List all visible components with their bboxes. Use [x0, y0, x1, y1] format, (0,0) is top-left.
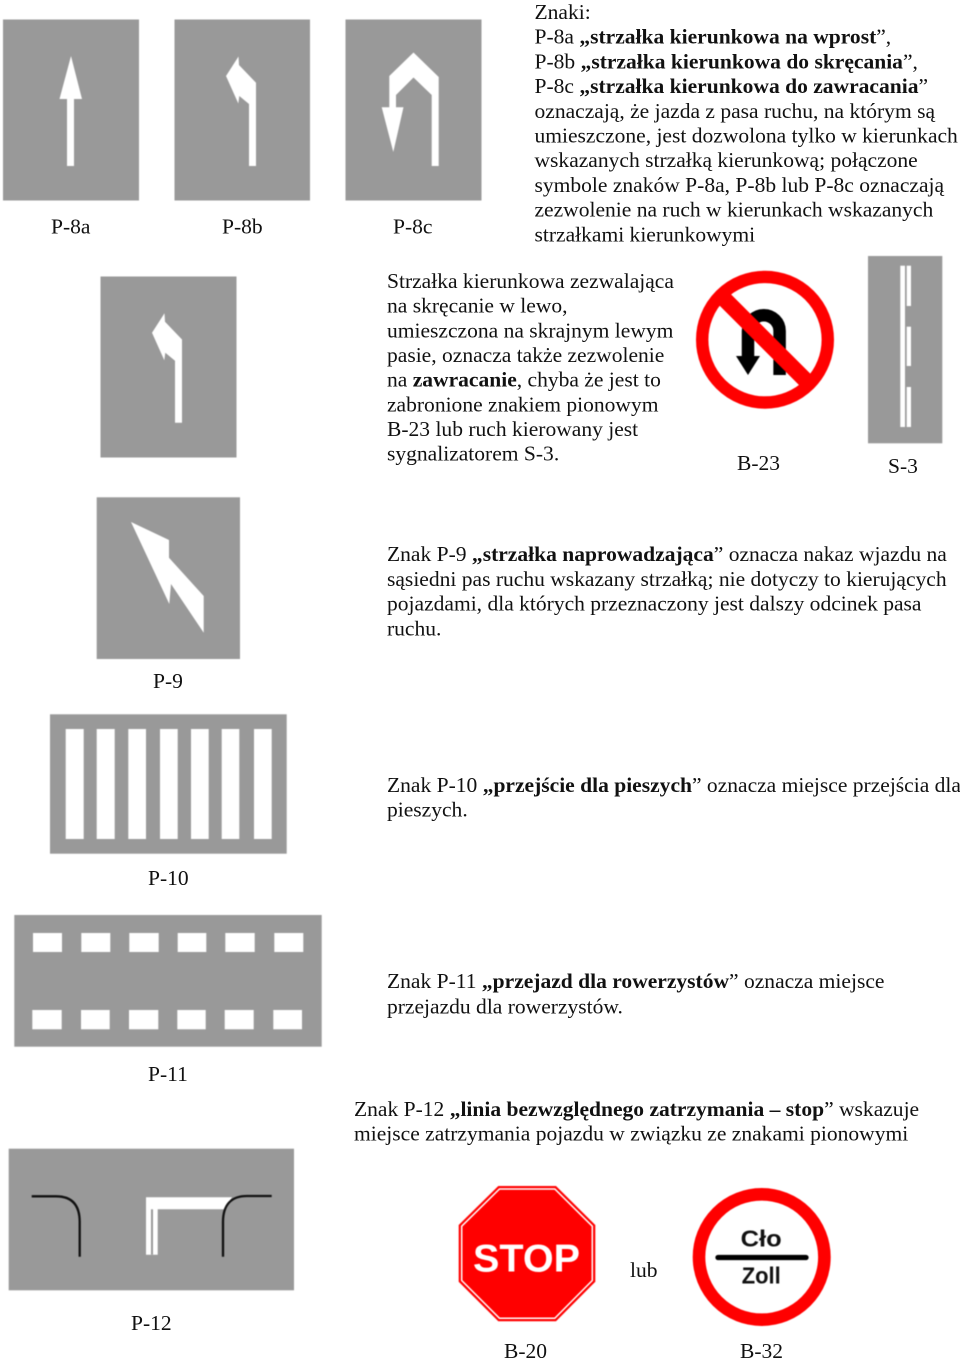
label P-12: P-12 [131, 1311, 172, 1335]
text: P-8 description: oznaczają, że jazda z pasa ruchu, na którym są [534, 99, 935, 123]
text: P-11 description: przejazdu dla rowerzystów. [387, 995, 623, 1019]
sign B-32: Cło [741, 1226, 782, 1252]
sign S-3 [868, 256, 942, 443]
sign P-10 [50, 714, 287, 854]
sign B-32: Zoll [742, 1262, 781, 1288]
sign B-20 STOP [459, 1186, 595, 1321]
sign B-32 [699, 1194, 824, 1320]
text: P-8 description: wskazanych strzałką kierunkową; połączone [534, 148, 918, 172]
text: left-turn arrow note: B-23 lub ruch kierowany jest [387, 417, 638, 441]
sign B-20 STOP: STOP [473, 1238, 580, 1281]
sign P-9 [97, 497, 240, 659]
text: lub: lub [630, 1258, 658, 1282]
text: left-turn arrow note: umieszczona na skrajnym lewym [387, 318, 674, 342]
text: P-12 description: miejsce zatrzymania pojazdu w związku ze znakami pionowymi [354, 1122, 908, 1146]
text: P-8 description: umieszczone, jest dozwolona tylko w kierunkach [534, 124, 958, 148]
text: P-9 description: ruchu. [387, 616, 441, 640]
text: left-turn arrow note: pasie, oznacza także zezwolenie [387, 343, 664, 367]
text: left-turn arrow note: na skręcanie w lewo, [387, 294, 568, 318]
text: P-11 description: Znak P-11 „przejazd dla rowerzystów” oznacza miejsce [387, 969, 884, 993]
label S-3: S-3 [888, 454, 918, 478]
text: P-10 description: Znak P-10 „przejście dla pieszych” oznacza miejsce przejścia dla [387, 773, 960, 797]
sign B-23 [702, 277, 828, 403]
label P-11: P-11 [148, 1062, 188, 1086]
label P-8b: P-8b [222, 214, 263, 238]
text: P-8 description: symbole znaków P-8a, P-8b lub P-8c oznaczają [534, 173, 945, 197]
text: P-8 description: Znaki: [534, 0, 591, 24]
text: P-8 description: zezwolenie na ruch w kierunkach wskazanych [534, 198, 933, 222]
label P-9: P-9 [153, 669, 183, 693]
text: P-8 description: P-8a „strzałka kierunkowa na wprost”, [534, 25, 891, 49]
label P-10: P-10 [148, 866, 189, 890]
sign P-8b, left-turn arrow on extreme left lane [100, 276, 236, 458]
text: P-9 description: pojazdami, dla których przeznaczony jest dalszy odcinek pasa [387, 592, 922, 616]
text: P-12 description: Znak P-12 „linia bezwzględnego zatrzymania – stop” wskazuje [354, 1097, 919, 1121]
text: left-turn arrow note: zabronione znakiem pionowym [387, 392, 659, 416]
sign P-12 [9, 1149, 294, 1290]
sign P-11 [14, 915, 322, 1047]
text: left-turn arrow note: na zawracanie, chyba że jest to [387, 368, 661, 392]
text: P-10 description: pieszych. [387, 798, 468, 822]
text: P-9 description: Znak P-9 „strzałka naprowadzająca” oznacza nakaz wjazdu na [387, 542, 947, 566]
label P-8c: P-8c [393, 214, 432, 238]
text: P-8 description: strzałkami kierunkowymi [534, 222, 755, 246]
text: P-8 description: P-8b „strzałka kierunkowa do skręcania”, [534, 49, 918, 73]
text: P-9 description: sąsiedni pas ruchu wskazany strzałką; nie dotyczy to kierujących [387, 567, 947, 591]
label B-23: B-23 [737, 451, 780, 475]
text: P-8 description: P-8c „strzałka kierunkowa do zawracania” [534, 74, 928, 98]
text: left-turn arrow note: sygnalizatorem S-3. [387, 442, 559, 466]
text: left-turn arrow note: Strzałka kierunkowa zezwalająca [387, 269, 674, 293]
sign P-8c [346, 20, 482, 200]
sign P-8b [174, 20, 310, 200]
sign P-8a [3, 20, 139, 200]
label P-8a: P-8a [51, 214, 91, 238]
